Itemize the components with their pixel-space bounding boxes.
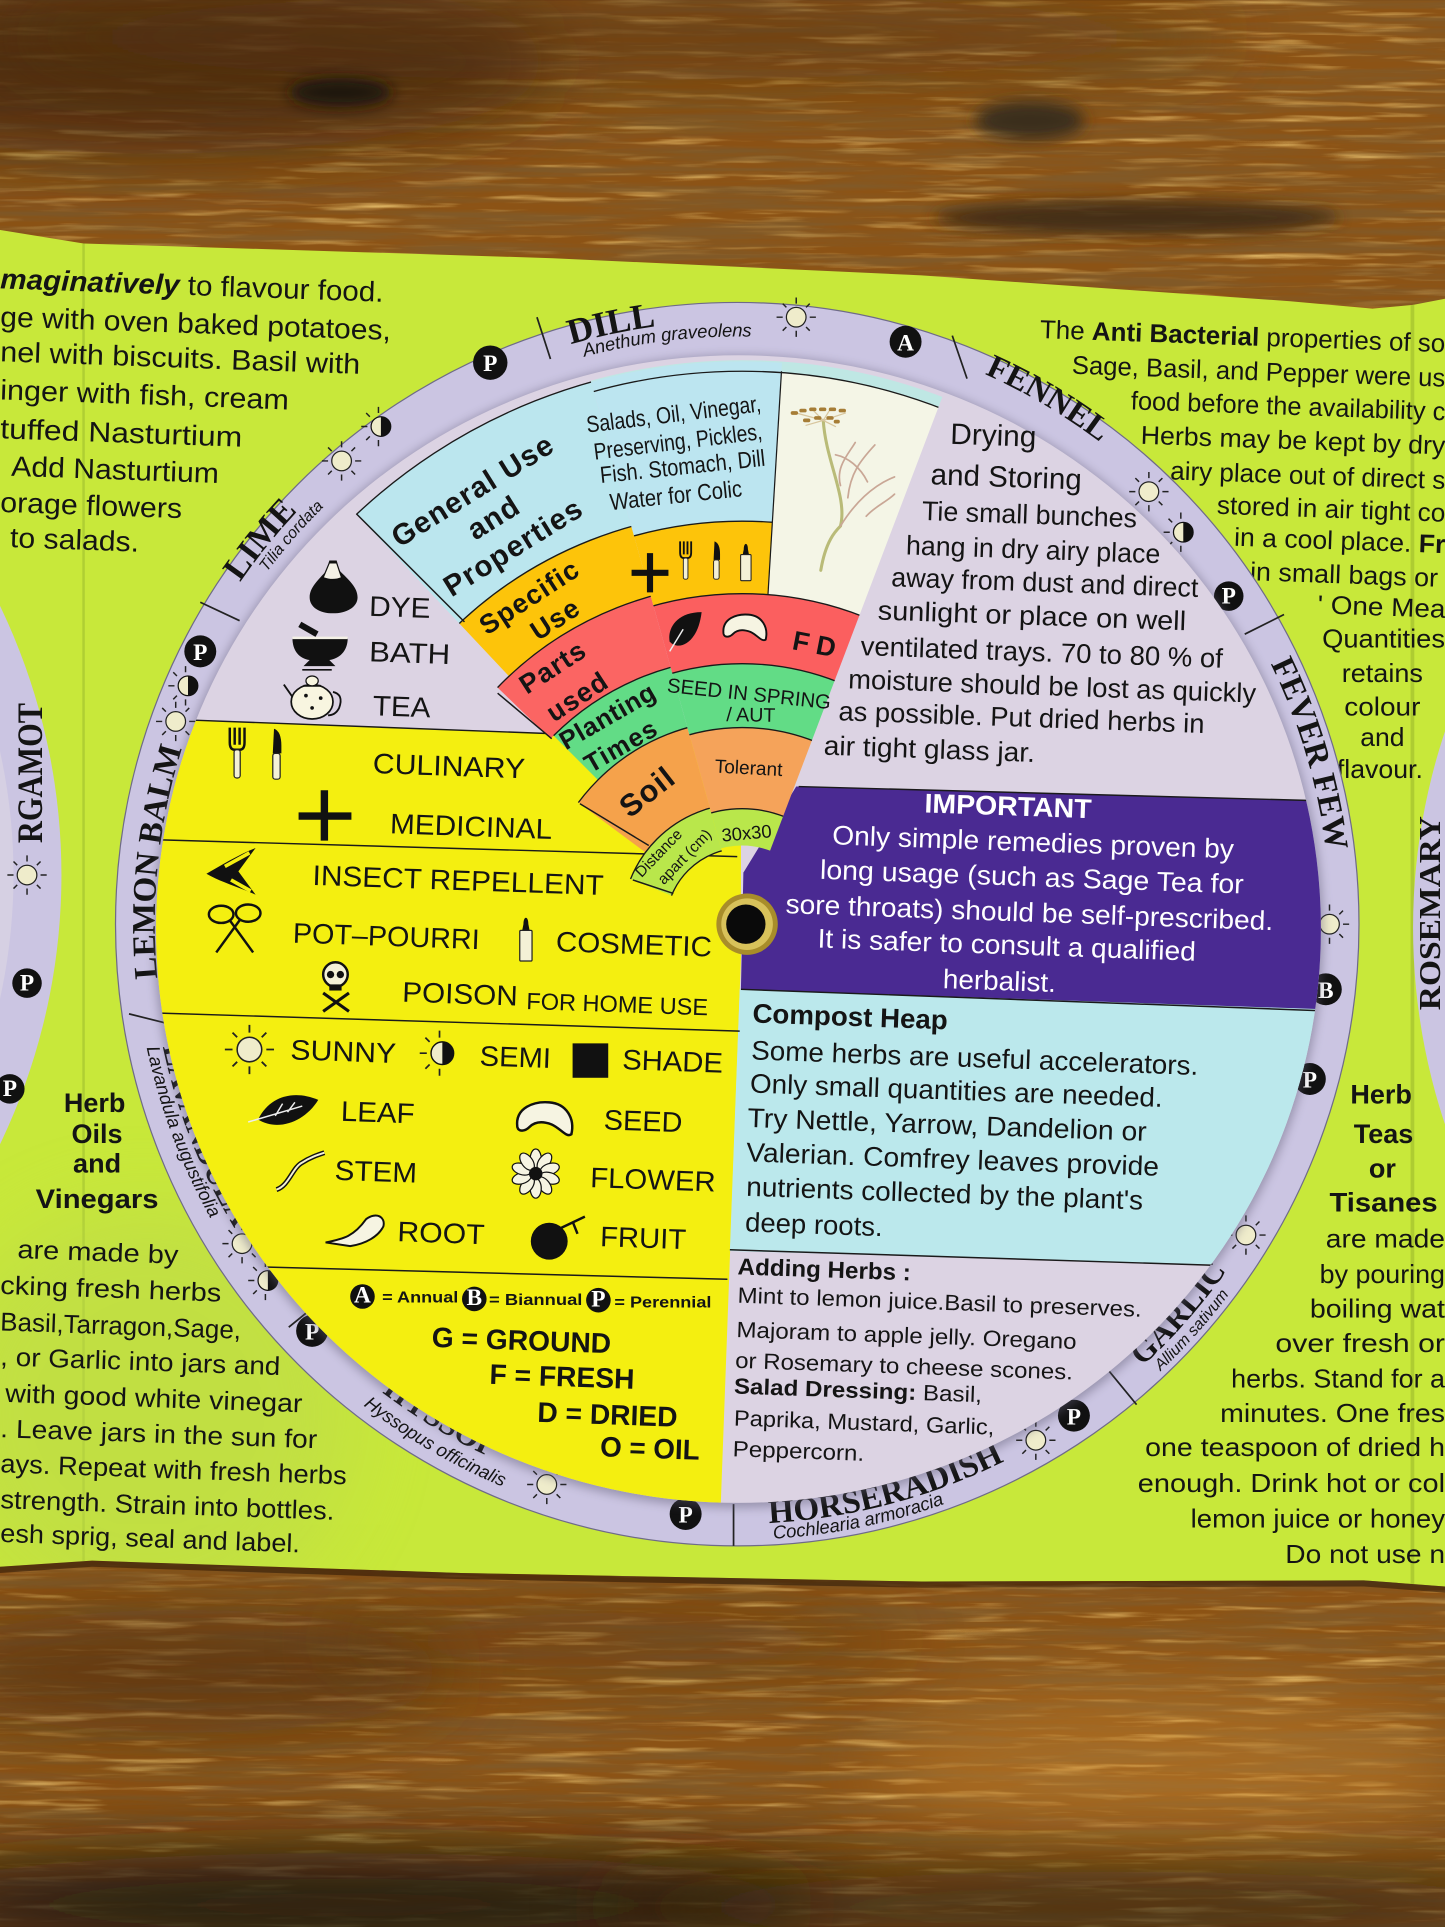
text block: herb oils and vinegars: Herb [64, 1088, 125, 1118]
text block: herb teas or tisanes: by pouring [1320, 1261, 1445, 1289]
icons on the outer ring: P [1303, 1068, 1317, 1094]
key: preparation codes: G = GROUND [431, 1321, 612, 1359]
key: life cycle legend: = Perennial [614, 1295, 711, 1312]
left fan of category labels: Specific [474, 554, 585, 641]
text block: herb teas or tisanes: enough. Drink hot or col [1138, 1470, 1445, 1498]
text block: anti bacterial properties: in a cool place. Fr [1234, 524, 1445, 559]
outer lavender ring with herb names: GARLIC [1133, 1263, 1224, 1362]
text block: herb oils and vinegars: with good white vinegar [4, 1380, 303, 1418]
text block: important notice: herbalist. [942, 964, 1056, 998]
text block: drying and storing: moisture should be lost as quickly [848, 664, 1257, 709]
text block: anti bacterial properties: stored in air tight co [1216, 492, 1445, 528]
text block: important notice: IMPORTANT [924, 788, 1093, 824]
key: life cycle legend [350, 1283, 711, 1312]
icons on the outer ring: P [193, 640, 207, 666]
text block: herb oils and vinegars: . Leave jars in the sun for [0, 1415, 318, 1454]
icons on the outer ring: A [897, 330, 914, 356]
outer lavender ring with herb names: Lavandula augustifolia [143, 1044, 226, 1221]
general use text in window [585, 390, 766, 515]
key: culinary and medicinal: CULINARY [372, 747, 526, 784]
text block: drying and storing: and Storing [930, 458, 1082, 497]
text block: anti bacterial properties: food before the availability c [1130, 387, 1445, 426]
outer lavender ring with herb names: HORSERADISH [768, 1445, 1004, 1524]
text block: drying and storing: ventilated trays. 70 to 80 % of [860, 631, 1224, 674]
text block: flavouring food, top left: maginatively to flavour food. [0, 262, 384, 308]
text block: herb teas or tisanes: Do not use n [1285, 1541, 1445, 1569]
illustration: dill plant [793, 409, 895, 570]
text block: herb teas or tisanes: or [1369, 1153, 1396, 1183]
left fan of category labels: used [541, 666, 614, 728]
parts used in window: FD [790, 625, 846, 665]
text block: herb oils and vinegars: cking fresh herbs [0, 1272, 222, 1308]
text block: herb teas or tisanes: Teas [1354, 1119, 1413, 1149]
text block: compost heap: nutrients collected by the plant's [746, 1172, 1144, 1216]
outer lavender ring with herb names: FENNEL [985, 354, 1105, 441]
key: plant parts: FLOWER [590, 1161, 716, 1198]
text block: herb teas or tisanes: Herb [1350, 1080, 1412, 1110]
outer lavender ring with herb names: FEVER FEW [1271, 655, 1348, 848]
neighbouring wheel: Bergamot: P [3, 1076, 17, 1102]
text block: herb teas or tisanes: are made [1326, 1225, 1445, 1253]
panel: yellow key [135, 718, 741, 1524]
usage icons: dye, bath, tea [284, 560, 358, 719]
key: plant parts: FRUIT [600, 1220, 687, 1255]
text block: compost heap: Valerian. Comfrey leaves provide [746, 1137, 1159, 1182]
key: plant parts: ROOT [397, 1215, 485, 1250]
left fan of category labels: Properties [438, 492, 589, 603]
text block: adding herbs: Mint to lemon juice.Basil to preserves. [737, 1283, 1142, 1322]
outer lavender ring with herb names: Tilia cordata [259, 502, 324, 570]
text block: compost heap: Try Nettle, Yarrow, Dandelion or [747, 1103, 1147, 1147]
icons on the outer ring: B [1318, 978, 1334, 1004]
text block: important notice: It is safer to consult a qualified [817, 924, 1196, 967]
key: preparation codes: D = DRIED [537, 1396, 678, 1433]
text block: drying and storing: Tie small bunches [922, 496, 1138, 533]
text block: compost heap [745, 998, 1199, 1242]
left fan of category labels: Times [580, 714, 663, 779]
key: light requirements [225, 1025, 724, 1079]
text block: herb oils and vinegars: esh sprig, seal and label. [0, 1520, 300, 1558]
key: plant parts: STEM [334, 1154, 418, 1189]
outer lavender ring with herb names: LEMON BALM [133, 743, 182, 980]
text block: herb teas or tisanes: over fresh or [1275, 1330, 1445, 1358]
left fan of category labels: Parts [514, 635, 592, 700]
text block: anti bacterial properties: ' One Mea [1317, 591, 1445, 624]
text block: flavouring food, top left: Add Nasturtium [11, 450, 219, 489]
key: repellent, pot-pourri, cosmetic, poison: FOR HOME USE [526, 988, 709, 1020]
text block: herb teas or tisanes: Tisanes [1329, 1188, 1438, 1218]
text block: flavouring food, top left: orage flowers [0, 486, 183, 524]
text block: anti bacterial properties: and [1360, 724, 1404, 752]
general use text in window: Salads, Oil, Vinegar, [585, 390, 762, 438]
text block: adding herbs: Adding Herbs : [737, 1253, 911, 1285]
text block: herb teas or tisanes [1138, 1080, 1445, 1569]
text block: anti bacterial properties: flavour. [1337, 756, 1423, 784]
usage labels: dye, bath, tea: TEA [372, 689, 431, 723]
text block: flavouring food, top left: ge with oven baked potatoes, [0, 300, 391, 346]
text block: flavouring food, top left: nel with biscuits. Basil with [0, 335, 361, 380]
text block: adding herbs: Peppercorn. [732, 1436, 865, 1466]
text block: compost heap: Some herbs are useful accelerators. [751, 1035, 1199, 1081]
left fan of category labels: Planting [555, 678, 661, 756]
text block: anti bacterial properties: Quantities [1322, 626, 1445, 654]
neighbouring wheel: Bergamot: P [20, 971, 34, 997]
general use text in window: Fish. Stomach, Dill [599, 445, 766, 488]
usage labels: dye, bath, tea [369, 590, 451, 723]
inner disc colour panels [123, 332, 1352, 1536]
panel: lime green folding card [0, 230, 1445, 1586]
text block: herb teas or tisanes: boiling wat [1310, 1295, 1445, 1323]
text block: herb oils and vinegars: Vinegars [36, 1184, 159, 1214]
text block: flavouring food, top left [0, 262, 391, 558]
usage labels: dye, bath, tea: DYE [369, 590, 431, 624]
text block: anti bacterial properties: The Anti Bacterial properties of so [1040, 316, 1445, 358]
text block: anti bacterial properties: Herbs may be kept by dry [1140, 422, 1445, 460]
text block: anti bacterial properties: in small bags or [1250, 558, 1439, 593]
key: preparation codes: O = OIL [600, 1430, 700, 1466]
text block: flavouring food, top left: to salads. [10, 521, 140, 558]
left fan of category labels: and [461, 489, 526, 547]
text block: anti bacterial properties: colour [1344, 693, 1421, 721]
text block: herb teas or tisanes: herbs. Stand for a [1231, 1365, 1445, 1393]
text block: herb oils and vinegars: Basil,Tarragon,Sage, [0, 1308, 241, 1345]
text block: drying and storing: Drying [950, 418, 1037, 454]
key: preparation codes [431, 1321, 700, 1466]
key: life cycle legend: B [467, 1285, 482, 1311]
text block: flavouring food, top left: tuffed Nasturtium [0, 412, 243, 453]
icons on the outer ring: P [1222, 583, 1236, 609]
neighbouring wheel: Bergamot [0, 606, 62, 1144]
key: preparation codes: F = FRESH [489, 1358, 635, 1395]
text block: anti bacterial properties: retains [1342, 660, 1423, 688]
text block: drying and storing: sunlight or place on well [877, 595, 1187, 636]
key: light requirements: SUNNY [290, 1033, 397, 1069]
key: plant parts: SEED [603, 1103, 683, 1138]
right fan window showing Dill data [587, 360, 942, 851]
text block: compost heap: Only small quantities are needed. [750, 1069, 1163, 1113]
text block: drying and storing: as possible. Put dried herbs in [838, 696, 1205, 739]
text block: herb oils and vinegars: Oils [72, 1119, 123, 1149]
left fan of category labels: apart (cm) [654, 826, 715, 888]
planting time in window: / AUT [726, 704, 776, 727]
spacing value: 30x30 [721, 820, 772, 846]
text block: adding herbs: Paprika, Mustard, Garlic, [734, 1406, 995, 1440]
text block: herb teas or tisanes: lemon juice or honey [1191, 1505, 1445, 1533]
text block: herb teas or tisanes: one teaspoon of dried h [1145, 1434, 1445, 1462]
key: repellent, pot-pourri, cosmetic, poison: POISON [402, 976, 518, 1012]
general use text in window: Water for Colic [608, 475, 743, 515]
text block: important notice: Only simple remedies proven by [832, 820, 1235, 864]
key: life cycle legend: = Annual [382, 1290, 458, 1307]
left fan of category labels: Distance [632, 826, 686, 881]
outer lavender ring with herb names: LAVANDULA [162, 1047, 238, 1228]
key: life cycle legend: = Biannual [489, 1292, 582, 1309]
panel: blue compost heap [730, 989, 1352, 1268]
inner rotating disc shadow [154, 355, 1323, 1508]
icons on the outer ring [156, 298, 1349, 1530]
general use text in window: Preserving, Pickles, [592, 418, 764, 465]
text block: herb oils and vinegars: and [73, 1148, 121, 1178]
text block: drying and storing [823, 418, 1257, 768]
key: light requirements: SEMI [479, 1040, 552, 1074]
text block: adding herbs [732, 1253, 1142, 1466]
text block: important notice: sore throats) should be self-prescribed. [785, 889, 1274, 936]
text block: herb oils and vinegars [0, 1088, 347, 1558]
outer lavender ring with herb names: DILL [565, 304, 654, 344]
key: repellent, pot-pourri, cosmetic, poison: INSECT REPELLENT [312, 859, 604, 901]
outer lavender ring with herb names: Anethum graveolens [584, 323, 752, 357]
outer lavender ring with herb names [116, 295, 1359, 1546]
text block: herb oils and vinegars: , or Garlic into jars and [0, 1343, 281, 1381]
outer lavender ring with herb names: Allium sativum [1157, 1290, 1228, 1372]
text block: anti bacterial properties [1040, 316, 1445, 784]
outer lavender ring with herb names: Cochlearia armoracia [774, 1494, 944, 1538]
icons on the outer ring: P [1067, 1404, 1081, 1430]
key: plant parts [248, 1095, 716, 1260]
text block: drying and storing: hang in dry airy place [906, 530, 1161, 569]
icons on the outer ring: P [483, 351, 497, 377]
soil value: Tolerant [714, 757, 784, 781]
left fan of category labels: Soil [612, 759, 682, 824]
text block: compost heap: deep roots. [745, 1207, 883, 1242]
key: life cycle legend: A [354, 1283, 371, 1309]
left fan of category labels [356, 381, 722, 896]
key: repellent, pot-pourri, cosmetic, poison: POT–POURRI [292, 917, 480, 955]
card bottom shadow [0, 1561, 1445, 1593]
icons on the outer ring: P [679, 1503, 693, 1529]
text block: important notice [785, 788, 1274, 998]
outer lavender ring with herb names: LIME [222, 498, 296, 582]
left fan of category labels: General Use [386, 428, 560, 554]
key: repellent, pot-pourri, cosmetic, poison: COSMETIC [555, 925, 712, 963]
key: repellent, pot-pourri, cosmetic, poison [206, 848, 712, 1020]
text block: drying and storing: away from dust and direct [891, 562, 1199, 603]
text block: adding herbs: Majoram to apple jelly. Oregano [736, 1317, 1077, 1354]
text block: herb oils and vinegars: strength. Strain into bottles. [0, 1486, 335, 1526]
text block: herb oils and vinegars: are made by [17, 1236, 179, 1270]
text block: flavouring food, top left: inger with fish, cream [0, 373, 290, 415]
text block: adding herbs: Salad Dressing: Basil, [734, 1374, 982, 1407]
outer lavender ring with herb names: Hyssopus officinalis [364, 1397, 506, 1486]
key: plant parts: LEAF [340, 1095, 415, 1129]
text block: adding herbs: or Rosemary to cheese scones. [735, 1348, 1073, 1385]
text block: anti bacterial properties: Sage, Basil, and Pepper were us [1071, 352, 1445, 393]
key: light requirements: SHADE [622, 1043, 724, 1079]
key: life cycle legend: P [591, 1286, 606, 1312]
key: culinary and medicinal [230, 728, 553, 845]
left fan of category labels: Use [525, 592, 586, 646]
specific use icons in window [632, 541, 751, 592]
text block: important notice: long usage (such as Sage Tea for [820, 855, 1244, 900]
text block: compost heap: Compost Heap [752, 998, 948, 1035]
text block: drying and storing: air tight glass jar. [823, 731, 1036, 768]
planting time in window: SEED IN SPRING [666, 675, 832, 714]
outer lavender ring with herb names: HYSSOP [382, 1388, 488, 1454]
key: culinary and medicinal: MEDICINAL [390, 807, 553, 845]
text block: anti bacterial properties: airy place out of direct s [1170, 457, 1445, 495]
eyelet [716, 893, 778, 955]
panel: purple important [741, 787, 1352, 1011]
usage labels: dye, bath, tea: BATH [369, 635, 451, 670]
icons on the outer ring: P [305, 1319, 319, 1345]
parts used in window [669, 612, 846, 665]
text block: herb oils and vinegars: ays. Repeat with fresh herbs [0, 1450, 347, 1490]
text block: herb teas or tisanes: minutes. One fres [1220, 1400, 1445, 1428]
neighbouring wheel: Bergamot: RGAMOT [10, 703, 50, 843]
